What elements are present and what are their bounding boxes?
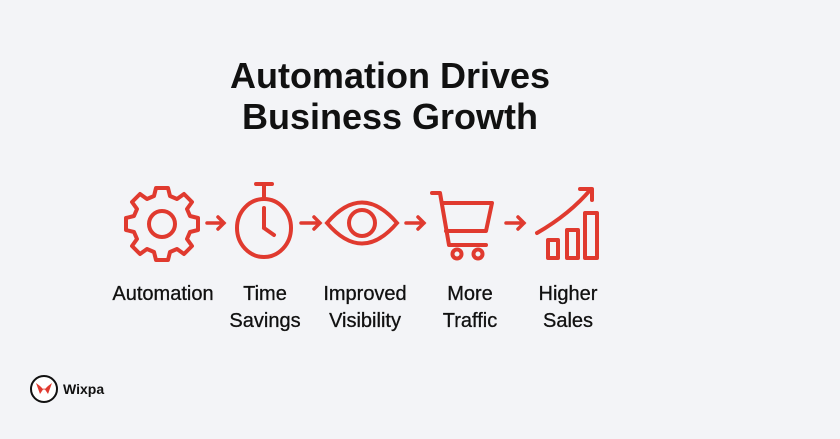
title [230,55,550,137]
icon: growth chart [537,189,597,258]
labels: Savings [229,310,301,332]
icon: cart [432,193,492,258]
title: Automation Drives [230,55,550,96]
arrow 2 [301,217,320,229]
icon: eye [327,202,397,244]
labels: Automation [112,283,214,305]
labels: Traffic [443,310,497,332]
icon: stopwatch [237,184,291,257]
arrow 1 [207,217,224,229]
logo: Wixpa [63,381,104,397]
labels: Time [243,283,287,305]
labels: Improved [323,283,407,305]
icon: gear [126,188,198,260]
labels: Visibility [329,310,401,332]
logo [31,376,104,402]
arrow 3 [406,217,424,229]
labels [112,283,598,332]
arrow 4 [506,217,524,229]
labels: Sales [543,310,593,332]
labels: Higher [539,283,598,305]
title: Business Growth [242,96,538,137]
labels: More [447,283,493,305]
